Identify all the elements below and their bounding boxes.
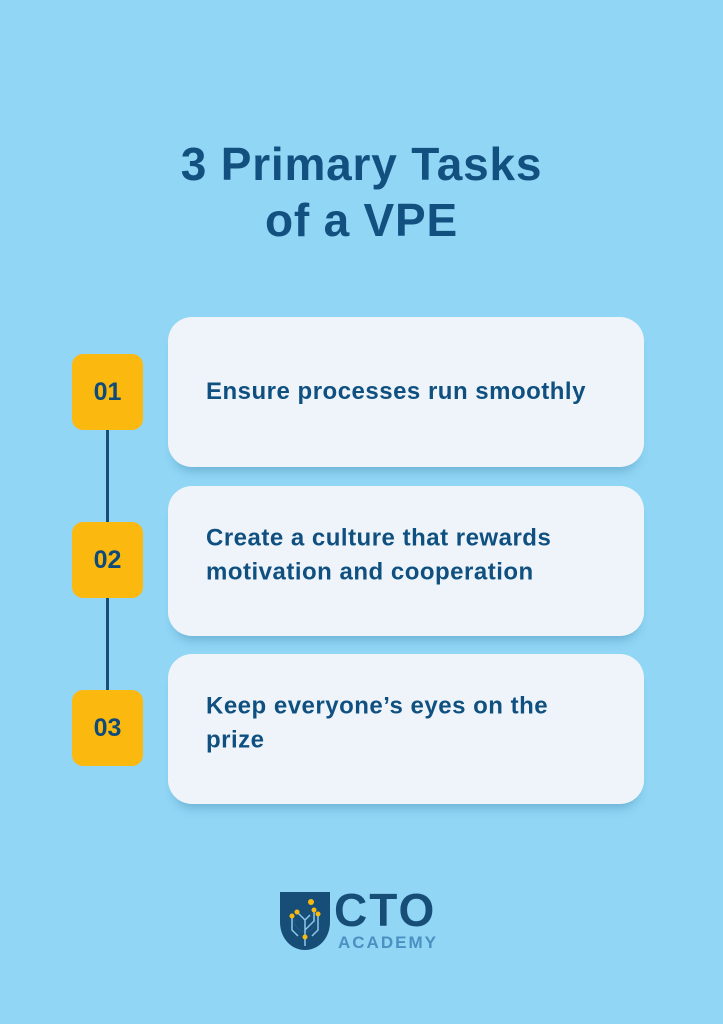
badge 01 (72, 354, 143, 430)
title: of a VPE (265, 194, 458, 246)
badge 03 (72, 690, 143, 766)
card 1 (168, 317, 644, 467)
badge 02 (72, 522, 143, 598)
card 2 (168, 486, 644, 636)
timeline connector (106, 430, 109, 690)
card 3 (168, 654, 644, 804)
badge 01: 01 (94, 378, 121, 406)
title (181, 138, 542, 246)
card 3: Keep everyone’s eyes on the prize (206, 693, 548, 754)
title: 3 Primary Tasks (181, 138, 542, 190)
badge 02: 02 (94, 546, 121, 574)
logo text ACADEMY: ACADEMY (338, 933, 438, 952)
logo text CTO: CTO (334, 884, 436, 936)
logo (280, 884, 438, 952)
badge 03: 03 (94, 714, 121, 742)
card 2: Create a culture that rewards motivation and cooperation (206, 525, 551, 586)
icon: shield (280, 892, 330, 950)
card 1: Ensure processes run smoothly (206, 378, 586, 405)
